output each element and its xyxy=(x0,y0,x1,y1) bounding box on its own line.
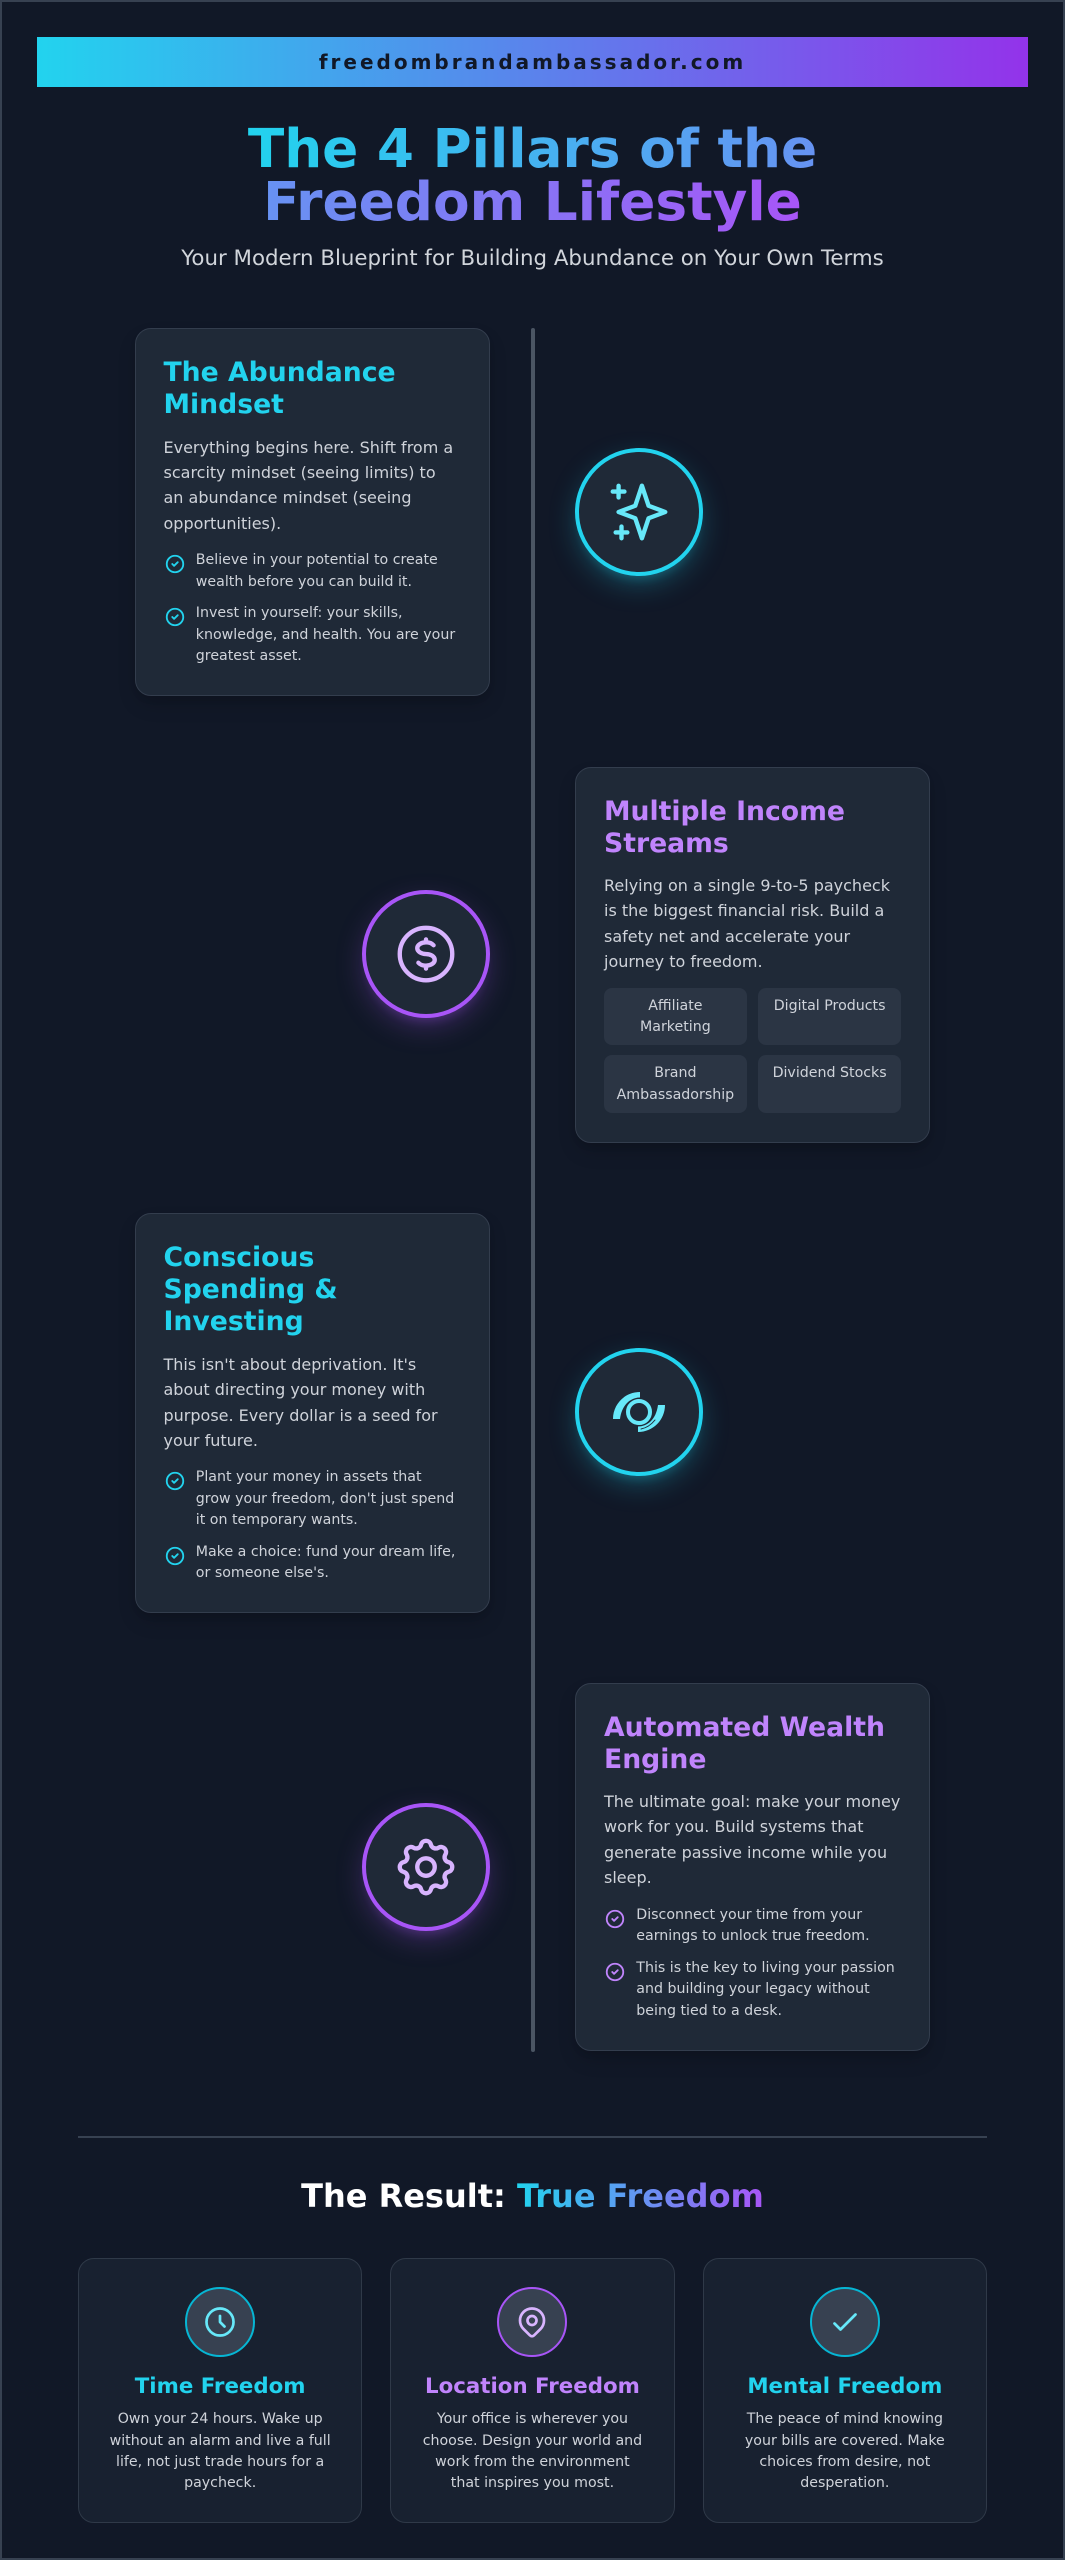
title xyxy=(248,117,817,233)
checklist: engine: being tied to a desk. xyxy=(636,2003,782,2019)
panel: conscious spending and investing xyxy=(134,1213,490,1613)
heading: the abundance mindset xyxy=(164,357,396,420)
income stream chips: Digital Products xyxy=(774,998,886,1014)
text: location freedom: Your office is wherever you xyxy=(437,2411,628,2427)
text: mental freedom xyxy=(745,2411,945,2491)
checklist: spending: grow your freedom, don't just spend xyxy=(196,1491,454,1507)
text: mental freedom: desperation. xyxy=(800,2475,889,2491)
heading: multiple income streams: Multiple Income xyxy=(604,796,845,826)
text: income description: Relying on a single 9-to-5 paycheck xyxy=(604,876,890,895)
heading: multiple income streams xyxy=(604,796,845,858)
text: spending description: your future. xyxy=(164,1431,258,1450)
icon: clock xyxy=(185,2287,255,2357)
income stream chips xyxy=(604,988,901,1113)
text: location freedom xyxy=(423,2411,642,2491)
icon: check mark xyxy=(810,2287,880,2357)
text: spending description: This isn't about deprivation. It's xyxy=(164,1355,416,1374)
heading: the abundance mindset: The Abundance xyxy=(164,357,396,388)
heading: conscious spending: Spending & xyxy=(164,1274,338,1305)
income stream chips: Brand xyxy=(654,1065,696,1081)
panel: time freedom xyxy=(78,2258,362,2523)
checklist: spending: Plant your money in assets that xyxy=(196,1469,422,1485)
panel: automated wealth engine xyxy=(575,1682,930,2051)
text: abundance description: scarcity mindset (seeing limits) to xyxy=(164,463,436,482)
text: engine description: sleep. xyxy=(604,1868,652,1887)
heading: mental freedom: Mental Freedom xyxy=(747,2374,942,2399)
icon: growth ring xyxy=(575,1348,703,1476)
panel: mental freedom xyxy=(703,2258,987,2523)
text: mental freedom: choices from desire, not xyxy=(759,2454,930,2470)
text: abundance description: opportunities). xyxy=(164,514,281,533)
text: time freedom: paycheck. xyxy=(184,2475,256,2491)
checklist: abundance: wealth before you can build it. xyxy=(196,574,412,590)
text: time freedom: Own your 24 hours. Wake up xyxy=(118,2411,323,2427)
checklist: abundance: greatest asset. xyxy=(196,648,302,664)
checklist: engine: and building your legacy without xyxy=(636,1981,870,1997)
heading: conscious spending: Investing xyxy=(164,1306,304,1337)
heading: the result: The Result: True Freedom xyxy=(301,2177,764,2215)
income stream chips: Affiliate xyxy=(648,998,703,1014)
checklist: engine: earnings to unlock true freedom. xyxy=(636,1928,870,1944)
checklist: abundance xyxy=(166,552,456,664)
heading: location freedom: Location Freedom xyxy=(425,2374,640,2399)
text: mental freedom: The peace of mind knowing xyxy=(747,2411,943,2427)
heading: automated wealth engine xyxy=(604,1712,885,1774)
heading: conscious spending xyxy=(164,1242,338,1337)
checklist: engine: Disconnect your time from your xyxy=(636,1907,862,1923)
text: location freedom: that inspires you most. xyxy=(451,2475,614,2491)
text: spending description: purpose. Every dollar is a seed for xyxy=(164,1406,438,1425)
panel: location freedom xyxy=(390,2258,675,2523)
text: time freedom: without an alarm and live a full xyxy=(110,2433,331,2449)
heading: automated wealth engine: Engine xyxy=(604,1744,706,1774)
text: location freedom: choose. Design your world and xyxy=(423,2433,642,2449)
text: income description: safety net and accelerate your xyxy=(604,927,850,946)
title: The 4 Pillars of the xyxy=(248,117,817,180)
icon: location pin xyxy=(497,2287,567,2357)
panel: the abundance mindset xyxy=(134,328,490,696)
checklist: engine: This is the key to living your passion xyxy=(636,1960,895,1976)
heading: time freedom: Time Freedom xyxy=(135,2374,306,2399)
checklist: abundance: Invest in yourself: your skills, xyxy=(196,605,402,621)
checklist: spending: or someone else's. xyxy=(196,1565,329,1581)
heading: conscious spending: Conscious xyxy=(164,1242,314,1273)
text: engine description xyxy=(604,1792,900,1887)
text: time freedom xyxy=(110,2411,331,2491)
text: engine description: generate passive income while you xyxy=(604,1843,887,1862)
income stream chips: Ambassadorship xyxy=(617,1087,734,1103)
text: income description: is the biggest financial risk. Build a xyxy=(604,901,884,920)
text: abundance description xyxy=(164,438,453,533)
text: spending description: about directing your money with xyxy=(164,1380,425,1399)
text: abundance description: an abundance mindset (seeing xyxy=(164,488,411,507)
text: abundance description: Everything begins here. Shift from a xyxy=(164,438,453,457)
text: engine description: The ultimate goal: make your money xyxy=(604,1792,900,1811)
checklist: spending xyxy=(166,1469,455,1581)
checklist: spending: Make a choice: fund your dream life, xyxy=(196,1544,455,1560)
text: engine description: work for you. Build systems that xyxy=(604,1817,863,1836)
text: mental freedom: your bills are covered. Make xyxy=(745,2433,945,2449)
title: Freedom Lifestyle xyxy=(263,170,802,233)
text: income description: journey to freedom. xyxy=(604,952,763,971)
icon: gear xyxy=(362,1803,490,1931)
heading: automated wealth engine: Automated Wealth xyxy=(604,1712,885,1742)
timeline vertical line xyxy=(531,328,535,2052)
website banner xyxy=(37,37,1028,87)
checklist: abundance: Believe in your potential to create xyxy=(196,552,438,568)
website banner: freedombrandambassador.com xyxy=(319,50,746,74)
text: income description xyxy=(604,876,890,971)
subtitle: Your Modern Blueprint for Building Abundance on Your Own Terms xyxy=(181,246,884,270)
text: spending description xyxy=(163,1355,438,1450)
icon: dollar coin xyxy=(362,890,490,1018)
checklist: abundance: knowledge, and health. You are your xyxy=(196,627,455,643)
checklist: spending: it on temporary wants. xyxy=(196,1512,358,1528)
text: location freedom: work from the environment xyxy=(435,2454,630,2470)
income stream chips: Dividend Stocks xyxy=(773,1065,887,1081)
heading: multiple income streams: Streams xyxy=(604,828,729,858)
income stream chips: Marketing xyxy=(640,1019,711,1035)
icon: sparkles xyxy=(575,448,703,576)
text: time freedom: life, not just trade hours for a xyxy=(116,2454,324,2470)
heading: the abundance mindset: Mindset xyxy=(164,389,284,420)
checklist: engine xyxy=(606,1907,895,2019)
panel: multiple income streams xyxy=(575,766,930,1143)
